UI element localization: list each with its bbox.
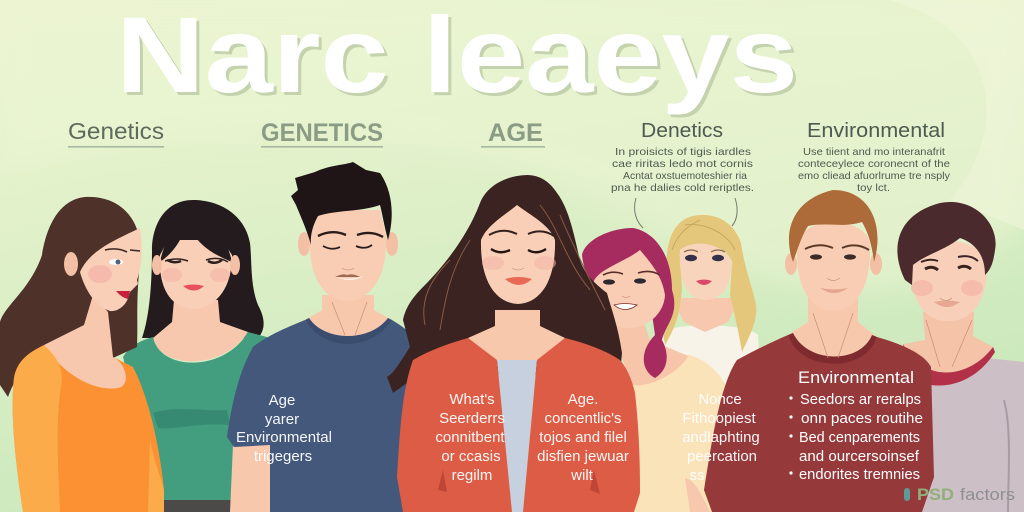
heading and note: Environmental: toy lct.	[857, 182, 890, 194]
text on jacket right: disfien jewuar	[537, 448, 629, 465]
logo: PSD factors: PSD	[917, 485, 954, 504]
heading and note: Denetics: pna he dalies cold reriptles.	[611, 182, 754, 194]
title: Narc leaeys	[119, 0, 801, 118]
text on jacket right: concentlic's	[544, 410, 622, 427]
text on navy shirt: Age	[269, 392, 295, 409]
person: far right man	[897, 202, 1024, 512]
person: magenta hair woman	[582, 228, 745, 512]
text on cream shirt: andlaphting	[682, 429, 760, 446]
heading and note: Environmental	[798, 120, 951, 194]
text on maroon shirt: Seedors ar reralps	[800, 391, 921, 408]
text on jacket left: regilm	[452, 467, 492, 484]
person: green top woman	[123, 200, 273, 512]
heading and note: Denetics: cae riritas ledo mot cornis	[612, 158, 753, 170]
text on maroon shirt: and ourcersoinsef	[799, 448, 920, 465]
heading and note: Denetics: Acntat oxstuemoteshier ria	[623, 170, 747, 182]
text on cream shirt: Fithoopiest	[682, 410, 757, 427]
heading and note: Denetics: In proisicts of tigis iardles	[615, 146, 751, 158]
heading and note: Denetics	[611, 120, 754, 194]
text on maroon shirt	[789, 369, 923, 483]
text on cream shirt	[682, 391, 760, 484]
heading and note: Environmental: Use tiient and mo interanafrit	[803, 146, 945, 158]
heading and note: Environmental: emo cliead afuorlrume tre nsply	[798, 170, 951, 182]
text on maroon shirt: onn paces routihe	[801, 410, 923, 427]
text on jacket left: Seerderrs	[439, 410, 505, 427]
person: central woman in red jacket	[387, 175, 640, 512]
heading: GENETICS bold: GENETICS	[261, 119, 383, 147]
text on jacket left	[435, 391, 505, 484]
text on jacket right: Age.	[568, 391, 598, 408]
text on cream shirt: ss	[690, 467, 704, 484]
heading and note: Denetics: Denetics	[641, 120, 723, 142]
person: brown hair man in maroon shirt	[704, 190, 934, 512]
text on jacket right: wilt	[570, 467, 594, 484]
text on jacket right	[537, 391, 629, 484]
text on cream shirt: Nonce	[698, 391, 742, 408]
person: man in navy shirt	[227, 162, 420, 512]
text on cream shirt: peercation	[687, 448, 757, 465]
text on navy shirt: yarer	[265, 411, 299, 428]
heading: AGE: AGE	[488, 119, 543, 147]
text on jacket right: tojos and filel	[539, 429, 627, 446]
logo: PSD factors	[904, 485, 1015, 504]
person: orange top woman	[0, 197, 164, 512]
heading: Genetics: Genetics	[68, 118, 164, 144]
person: blonde woman	[655, 215, 760, 430]
curved connector lines	[635, 198, 737, 228]
text on navy shirt	[236, 392, 332, 465]
text on navy shirt: trigegers	[254, 448, 312, 465]
text on maroon shirt: Environmental	[798, 369, 914, 387]
text on jacket left: or ccasis	[441, 448, 501, 465]
logo: PSD factors: factors	[960, 485, 1015, 504]
text on navy shirt: Environmental	[236, 429, 332, 446]
text on jacket left: connitbent	[435, 429, 505, 446]
heading and note: Environmental: conteceylece coronecnt of the	[798, 158, 950, 170]
heading and note: Environmental: Environmental	[807, 120, 945, 142]
text on jacket left: What's	[449, 391, 495, 408]
text on maroon shirt: endorites tremnies	[799, 466, 920, 483]
text on maroon shirt: Bed cenparements	[799, 429, 920, 446]
